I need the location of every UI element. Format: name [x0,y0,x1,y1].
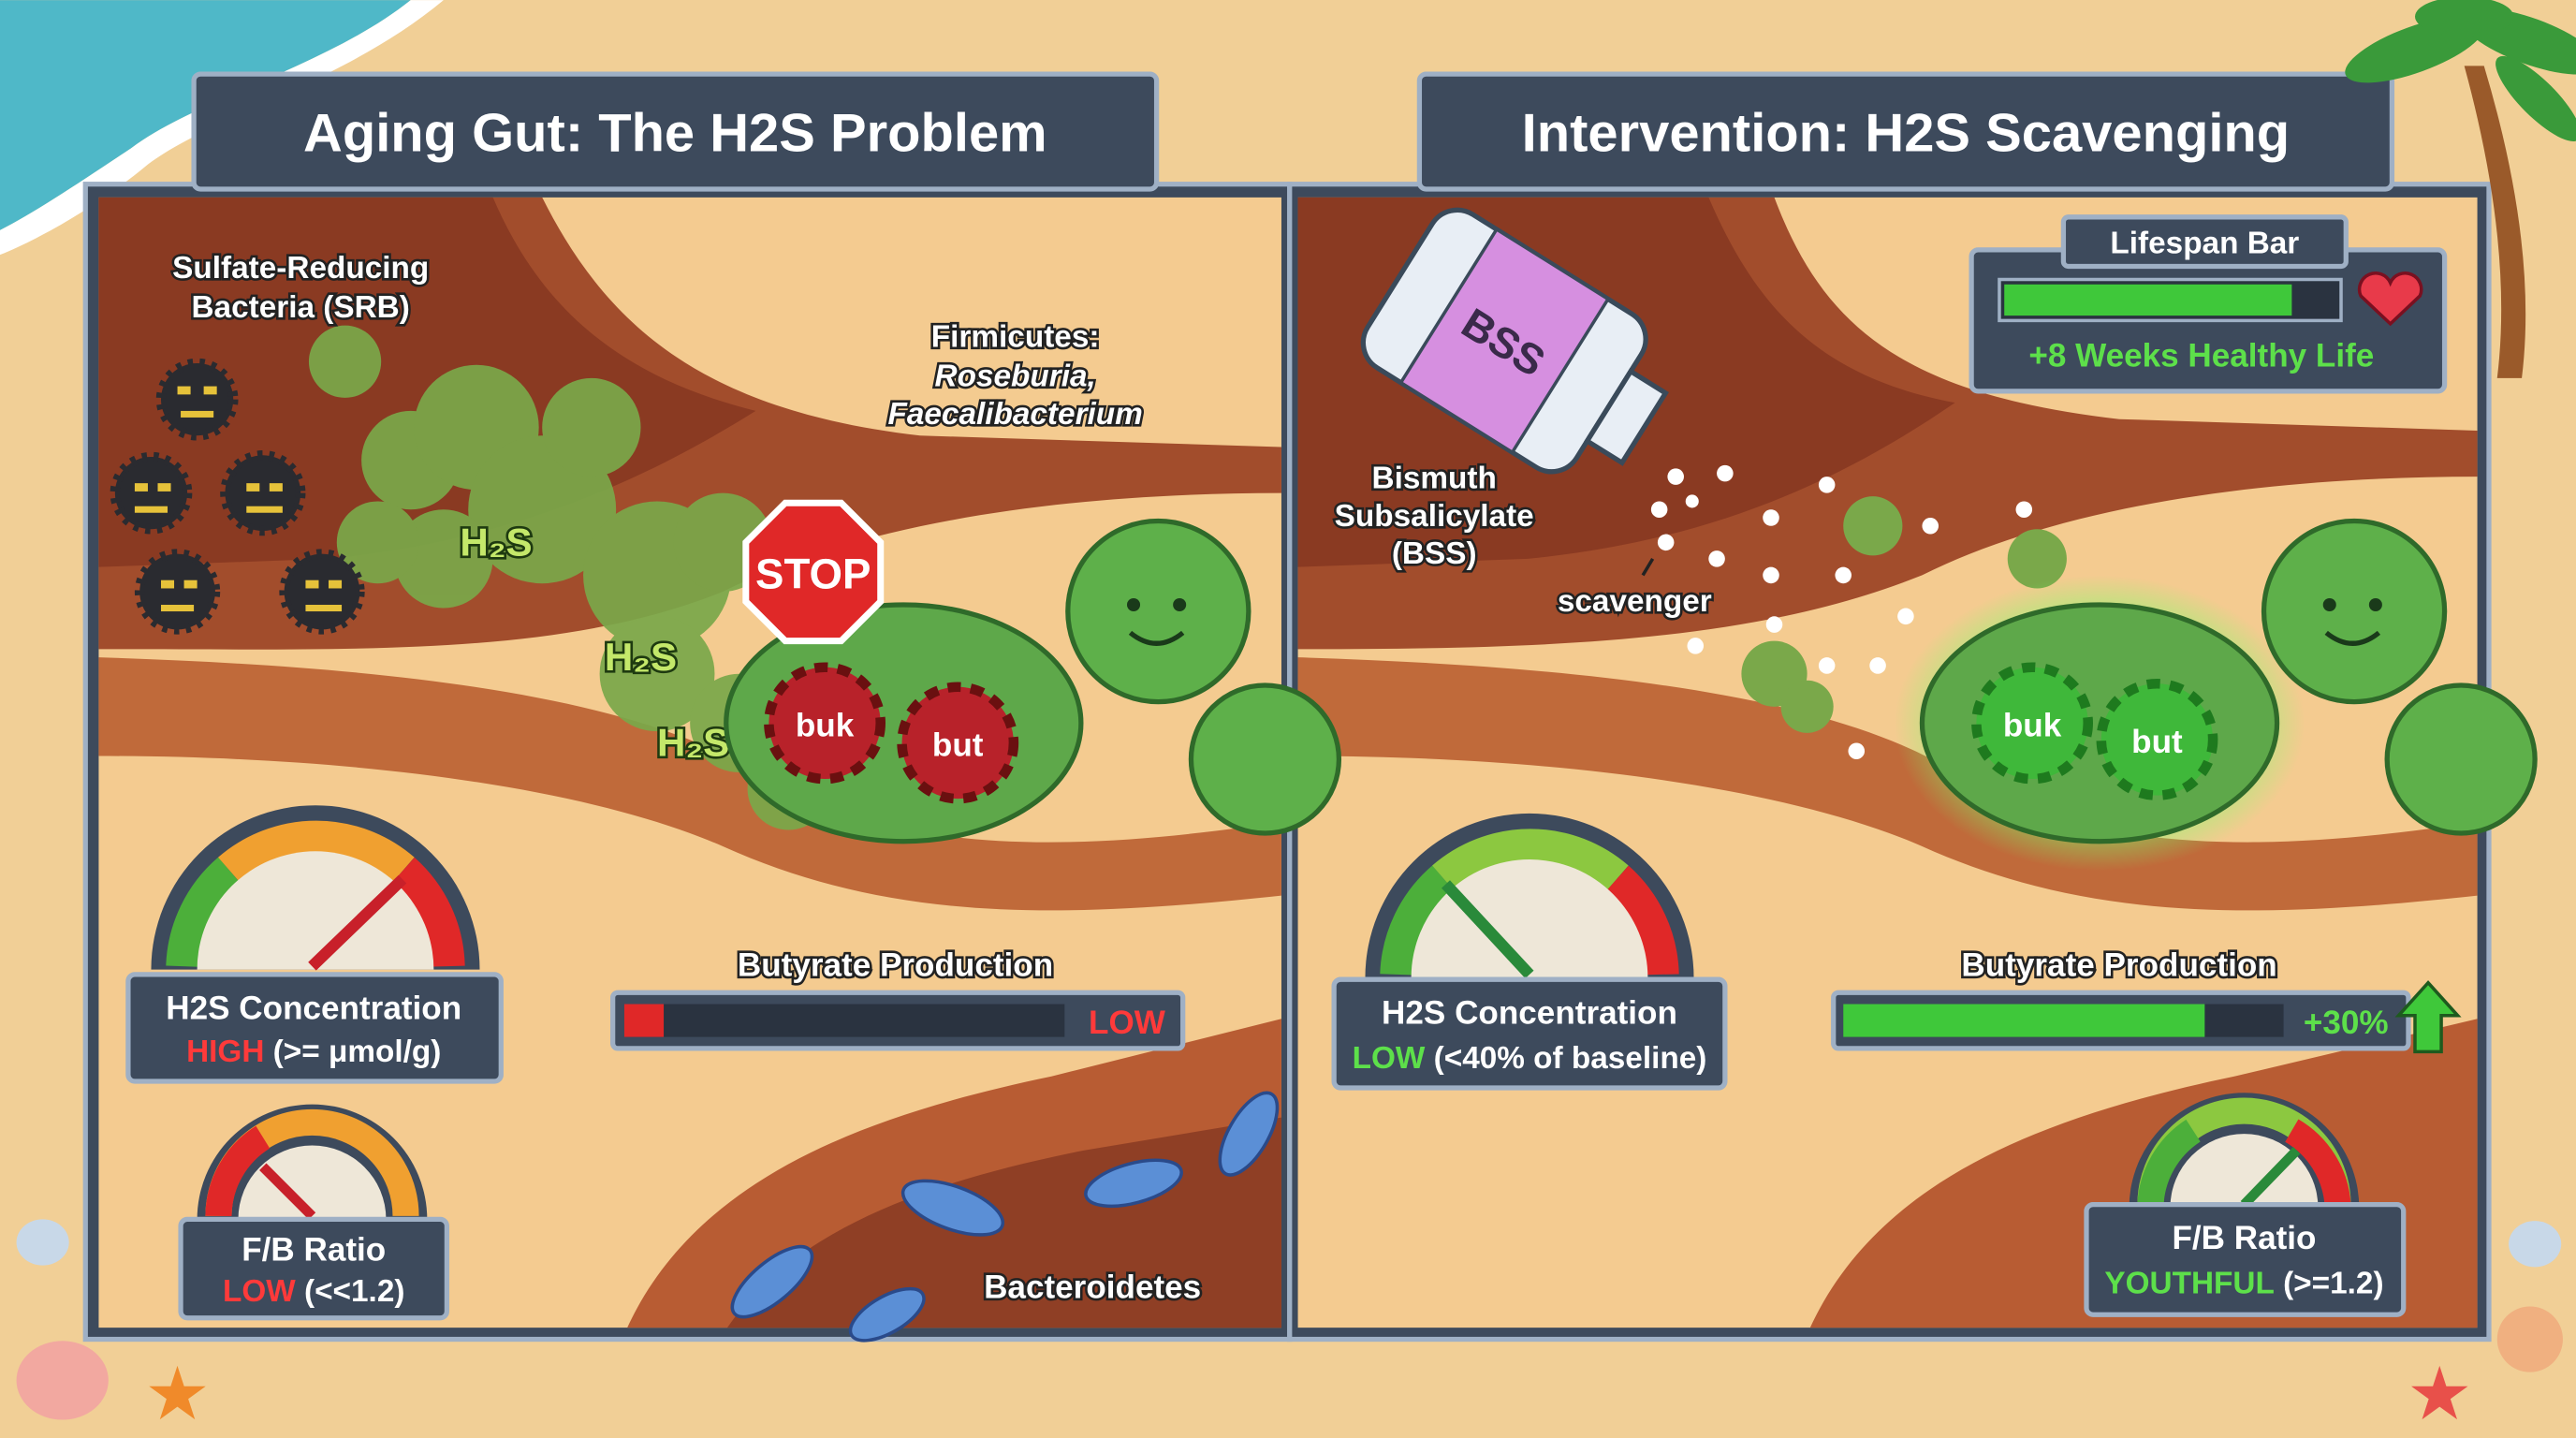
shells and starfish: ★ [148,1357,207,1431]
butyrate bar left: Butyrate Production [738,947,1053,984]
H2S labels: H₂S [605,635,677,679]
gauge H2S left [151,805,479,970]
gears left: but [932,726,984,763]
SRB bacteria [115,363,359,629]
FB box left: F/B Ratio [242,1231,386,1268]
SRB label [172,251,429,325]
FB box right: YOUTHFUL (>=1.2) [2104,1266,2384,1300]
FB gauge right [2130,1093,2359,1208]
gauge H2S right [1365,814,1694,977]
BSS label: (BSS) [1392,536,1477,571]
scavenger label: scavenger [1558,584,1712,619]
scavenger dots [1651,465,2032,759]
bacteroidetes [722,1084,1289,1351]
stop sign [746,503,881,641]
BSS label: Subsalicylate [1335,499,1534,534]
lifespan bar [1971,217,2445,391]
butyrate bar left: LOW [1089,1005,1166,1041]
green blob right glowing: but [2131,724,2183,760]
H2S box left: HIGH (>= μmol/g) [186,1034,441,1069]
FB gauge left [198,1105,427,1219]
FB box right [2086,1205,2404,1314]
scavenger label [1558,559,1712,619]
up arrow [2398,983,2458,1051]
FB box left [181,1219,446,1318]
FB box right: F/B Ratio [2172,1220,2316,1256]
H2S labels [460,520,729,764]
butyrate bar right: Butyrate Production [1961,947,2277,984]
green blob left [726,605,1081,842]
H2S labels: H₂S [460,520,533,564]
BSS bottle: BSS [1454,299,1553,386]
SRB label: Sulfate-Reducing [172,251,429,286]
palm tree [2337,0,2576,378]
shells and starfish: ★ [2410,1357,2469,1431]
butyrate bar right: +30% [2304,1005,2389,1041]
title right [1419,74,2392,189]
Firmicutes label [887,319,1143,432]
Firmicutes label: Firmicutes: [931,319,1099,354]
small gas right [1741,496,2067,733]
H2S box left: H2S Concentration [166,990,461,1026]
title right: Intervention: H2S Scavenging [1522,104,2290,164]
butyrate bar right [1834,947,2408,1049]
H2S labels: H₂S [657,720,729,764]
gears left [768,668,1014,799]
title left [194,74,1157,189]
H2S box left [128,975,501,1081]
ocean corner [0,0,444,255]
SRB label: Bacteria (SRB) [191,290,410,325]
smiley cells left [1068,521,1339,833]
stop sign: STOP [755,550,871,597]
lifespan bar: +8 Weeks Healthy Life [2028,338,2374,374]
lifespan bar: Lifespan Bar [2110,226,2299,260]
bacteroidetes: Bacteroidetes [984,1269,1201,1306]
butyrate bar left [613,947,1183,1049]
green blob right glowing: buk [2003,707,2062,743]
BSS label: Bismuth [1372,461,1497,495]
left panel [85,184,1290,1340]
shells and starfish [17,1219,2563,1431]
smiley cells right [2264,521,2535,833]
H2S box right [1334,979,1725,1088]
H2S box right: H2S Concentration [1382,995,1677,1032]
gas clouds [309,326,884,835]
title left: Aging Gut: The H2S Problem [303,104,1047,164]
green blob right glowing [1895,575,2305,871]
Firmicutes label: Roseburia, [935,360,1096,394]
FB box left: LOW (<<1.2) [223,1274,404,1309]
Firmicutes label: Faecalibacterium [887,397,1143,432]
H2S box right: LOW (<40% of baseline) [1353,1041,1706,1076]
gears left: buk [796,707,855,743]
BSS bottle [1352,198,1691,505]
BSS label [1335,461,1534,571]
right panel [1290,184,2489,1340]
